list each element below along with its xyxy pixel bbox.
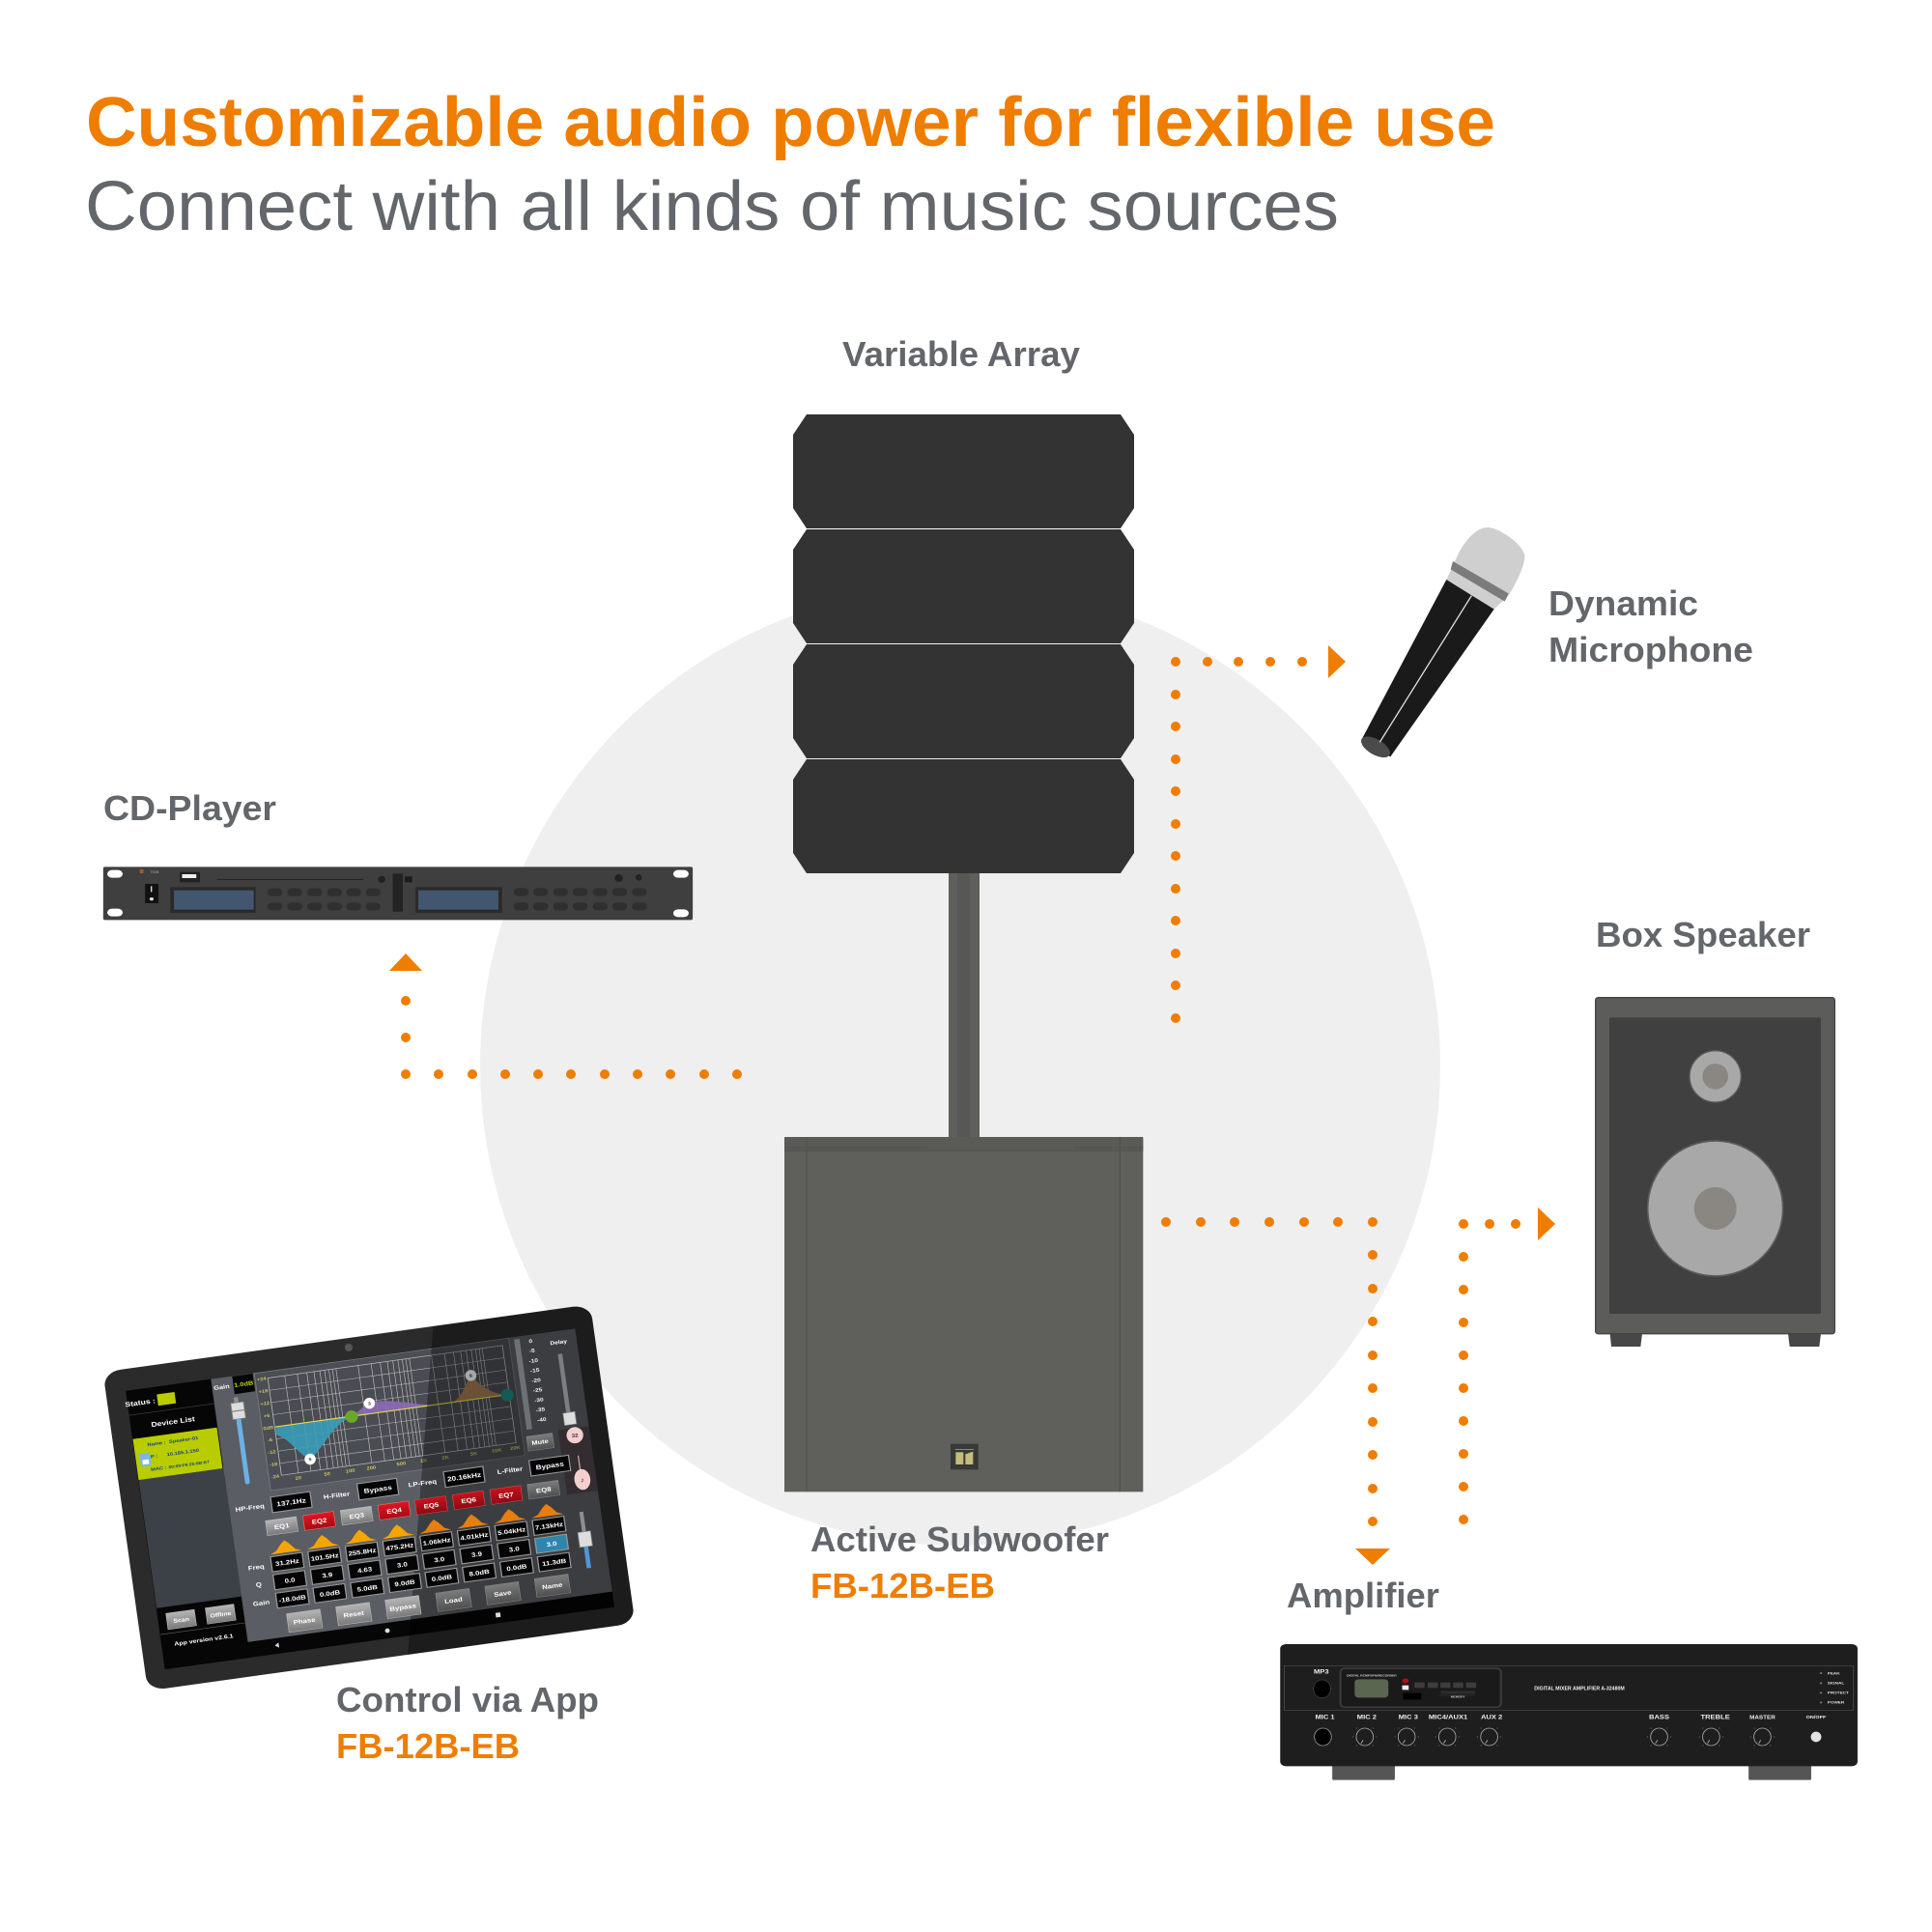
level meter: Mute (531, 1438, 549, 1447)
logo badge (951, 1444, 979, 1469)
frequency values: 475.2Hz (385, 1542, 414, 1552)
level meter: -30 (534, 1398, 545, 1405)
device panel: App version v2.6.1 (174, 1634, 234, 1647)
input labels (1315, 1715, 1826, 1720)
device panel: Name : (147, 1440, 166, 1448)
gain values: 11.3dB (542, 1557, 567, 1568)
gain values: -18.0dB (278, 1594, 306, 1605)
background circle (480, 585, 1440, 1546)
array module 1 (793, 414, 1134, 528)
axis labels: 500 (396, 1462, 407, 1467)
device panel: Speaker-01 (169, 1435, 199, 1445)
connector: to CD player (389, 953, 742, 1079)
device panel: Device List (151, 1415, 196, 1429)
row labels: Q (255, 1581, 263, 1589)
action buttons: Save (494, 1589, 512, 1599)
action buttons: Load (444, 1596, 463, 1605)
axis labels: 50 (324, 1471, 330, 1478)
action buttons: Bypass (389, 1603, 416, 1613)
axis labels: 5K (470, 1451, 478, 1458)
pole (949, 873, 980, 1137)
EQ buttons: EQ3 (349, 1512, 365, 1520)
recorder display: MEMORY (1451, 1695, 1465, 1699)
action buttons (286, 1574, 571, 1633)
title: Customizable audio power for flexible use (86, 84, 1495, 161)
recorder display (1341, 1668, 1501, 1707)
device panel: Offline (210, 1610, 232, 1620)
filter row: 20.16kHz (447, 1470, 482, 1483)
array module 2 (793, 529, 1134, 643)
label: subwoofer model: FB-12B-EB (810, 1566, 995, 1605)
device panel: Scan (173, 1616, 190, 1625)
axis labels: +12 (260, 1401, 270, 1407)
axis labels: 100 (346, 1468, 355, 1475)
Q values: 3.9 (471, 1550, 482, 1559)
gain fader (214, 1374, 255, 1484)
Q values: 3.0 (397, 1561, 408, 1569)
axis labels: -6 (268, 1437, 273, 1443)
status LEDs: SIGNAL (1828, 1681, 1845, 1686)
status LEDs (1820, 1671, 1849, 1705)
status LEDs: PROTECT (1828, 1690, 1849, 1695)
EQ buttons: EQ5 (423, 1501, 440, 1511)
recorder display: DIGITAL RCMP3/FM/RECORDER (1347, 1674, 1398, 1678)
gain values: 8.0dB (469, 1568, 490, 1577)
input labels: MASTER (1749, 1716, 1776, 1720)
label: amplifier: Amplifier (1287, 1576, 1439, 1615)
rack holes (107, 870, 689, 917)
device panel (125, 1387, 247, 1650)
label: control via app: Control via App (336, 1680, 599, 1719)
main app panel (211, 1328, 612, 1642)
frequency values: 101.5Hz (310, 1552, 340, 1563)
app controls (213, 1329, 613, 1652)
Q values: 3.0 (434, 1556, 445, 1564)
label: variable array: Variable Array (842, 334, 1080, 374)
level meter: 0 (528, 1339, 533, 1345)
device panel: MAC : (151, 1465, 167, 1473)
EQ buttons (266, 1480, 560, 1536)
level meter: -40 (537, 1417, 548, 1424)
row labels (248, 1565, 270, 1605)
axis labels: -12 (268, 1450, 276, 1456)
gain fader: Gain (213, 1383, 230, 1392)
axis labels: +18 (258, 1389, 269, 1395)
action buttons: Phase (293, 1616, 316, 1627)
active subwoofer (784, 1137, 1143, 1492)
status LEDs: PEAK (1828, 1671, 1840, 1676)
row labels: Gain (252, 1599, 270, 1608)
frequency values: 5.04kHz (497, 1526, 526, 1537)
axis labels: 1K (420, 1458, 428, 1464)
tweeter (1690, 1051, 1741, 1102)
display screens (170, 887, 502, 913)
filter row (234, 1455, 571, 1518)
delay controls: ♪ (580, 1476, 584, 1484)
Q values (273, 1534, 568, 1590)
EQ graph: 8 (469, 1374, 473, 1379)
level meter: -20 (531, 1378, 542, 1384)
amplifier (1280, 1644, 1858, 1780)
level meter (513, 1336, 554, 1451)
filter row: LP-Freq (408, 1478, 437, 1489)
delay controls: 32 (572, 1434, 579, 1439)
axis labels: 20K (510, 1445, 521, 1452)
axis labels: 0dB (263, 1425, 274, 1432)
Q values: 4.63 (357, 1566, 373, 1575)
device panel: IP : (149, 1454, 158, 1461)
row labels: Freq (247, 1563, 265, 1573)
icon: microphone (1358, 527, 1524, 762)
level meter: -5 (529, 1349, 536, 1354)
EQ buttons: EQ2 (311, 1517, 327, 1526)
Q values: 3.9 (322, 1572, 333, 1579)
input labels: BASS (1649, 1715, 1670, 1720)
axis labels: 2K (441, 1455, 449, 1462)
axis labels: -24 (270, 1474, 280, 1480)
Q values: 0.0 (284, 1577, 296, 1585)
EQ buttons: EQ1 (274, 1522, 290, 1531)
connector: to microphone (1171, 645, 1346, 1023)
status LEDs: POWER (1828, 1700, 1844, 1705)
EQ buttons: EQ4 (386, 1507, 402, 1516)
knobs (1315, 1727, 1775, 1746)
axis labels: -18 (270, 1462, 278, 1468)
axis labels: 20 (295, 1476, 302, 1482)
axis labels: +6 (263, 1413, 270, 1419)
connector: to amplifier (1161, 1217, 1390, 1565)
filter row: L-Filter (497, 1465, 524, 1476)
delay controls: Delay (550, 1339, 568, 1347)
filter row: Bypass (363, 1484, 392, 1495)
gain values: 0.0dB (320, 1589, 341, 1599)
frequency values: 255.8Hz (348, 1547, 377, 1557)
EQ buttons: EQ8 (536, 1486, 552, 1494)
speaker array (793, 414, 1134, 873)
EQ graph: 5 (308, 1457, 312, 1463)
label: active subwoofer: Active Subwoofer (810, 1520, 1109, 1559)
bottom nav bar (274, 1611, 500, 1649)
CD player: TDB (150, 869, 159, 874)
device panel: Status : (125, 1397, 156, 1408)
frequency values: 31.2Hz (275, 1557, 300, 1568)
filter row: H-Filter (323, 1491, 351, 1501)
filter row: 137.1Hz (276, 1496, 307, 1508)
EQ buttons: EQ6 (461, 1496, 477, 1505)
subtitle: Connect with all kinds of music sources (85, 168, 1339, 245)
input labels: ON/OFF (1806, 1715, 1826, 1720)
gain values (275, 1552, 571, 1608)
box speaker (1596, 998, 1834, 1347)
axis labels: 10K (492, 1448, 502, 1455)
control buttons (268, 888, 647, 910)
label: CD player: CD-Player (103, 788, 276, 828)
band fills (275, 1418, 346, 1457)
label: dynamic microphone: Dynamic (1548, 583, 1698, 623)
label: box speaker: Box Speaker (1596, 915, 1810, 954)
level meter: -25 (533, 1387, 543, 1394)
input labels: MIC 1 (1315, 1715, 1335, 1720)
EQ graph: 3 (368, 1402, 372, 1406)
device panel: 00:09:F6:25:6B:E7 (168, 1460, 211, 1469)
filter row: HP-Freq (235, 1503, 265, 1514)
level meter: -35 (535, 1407, 546, 1414)
label: app model: FB-12B-EB (336, 1726, 520, 1766)
screen (126, 1374, 614, 1669)
level meter: -15 (530, 1368, 541, 1375)
level meter: -10 (528, 1358, 539, 1365)
axis labels: 200 (366, 1465, 377, 1472)
axis labels: +24 (257, 1377, 267, 1383)
connector: amplifier to box speaker (1459, 1208, 1555, 1524)
input labels: TREBLE (1700, 1715, 1730, 1720)
action buttons: Name (542, 1581, 563, 1591)
reflection shading (408, 1306, 634, 1655)
EQ graph (254, 1338, 526, 1491)
tablet with app screen (104, 1306, 634, 1689)
label: dynamic microphone: Microphone (1548, 630, 1753, 669)
CD player (103, 867, 693, 920)
frequency values (270, 1517, 566, 1572)
frequency values: 7.13kHz (535, 1520, 564, 1532)
array module 4 (793, 759, 1134, 873)
input labels: MIC4/AUX1 (1429, 1715, 1467, 1720)
amplifier: MP3 (1314, 1669, 1329, 1675)
input labels: AUX 2 (1481, 1715, 1502, 1720)
input labels: MIC 3 (1399, 1715, 1418, 1720)
gain values: 9.0dB (394, 1578, 415, 1588)
gain values: 5.0dB (356, 1584, 378, 1594)
array module 3 (793, 644, 1134, 758)
power button (1811, 1732, 1821, 1742)
Q values: 3.0 (508, 1546, 520, 1553)
frequency values: 1.06kHz (422, 1537, 452, 1548)
EQ buttons: EQ7 (498, 1492, 514, 1500)
Q values: 3.0 (546, 1540, 557, 1548)
feet (1332, 1765, 1811, 1780)
infographic canvas (89, 95, 1858, 1780)
input labels: MIC 2 (1357, 1715, 1377, 1720)
device panel: 10.185.1.150 (166, 1448, 199, 1458)
filter row: Bypass (535, 1460, 564, 1471)
delay controls (551, 1340, 598, 1569)
band knobs (304, 1370, 514, 1464)
action buttons: Reset (343, 1609, 365, 1619)
gain values: 0.0dB (431, 1574, 452, 1583)
frequency values: 4.01kHz (460, 1531, 489, 1542)
axis labels (257, 1377, 520, 1480)
gain fader: 1.0dB (234, 1380, 254, 1389)
label: dynamic microphone (1548, 583, 1753, 669)
woofer (1648, 1141, 1783, 1276)
model text: DIGITAL MIXER AMPLIFIER A-32480M (1534, 1687, 1625, 1691)
EQ curve icons (269, 1502, 563, 1554)
gain values: 0.0dB (506, 1563, 527, 1573)
